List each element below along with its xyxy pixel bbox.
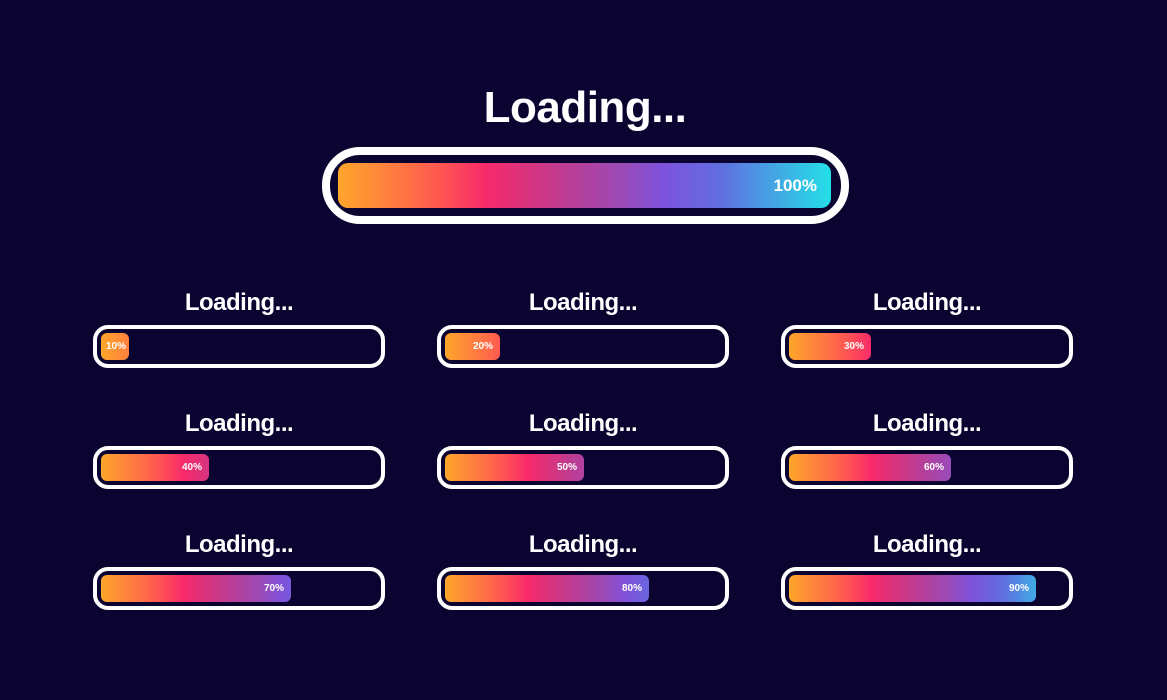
label 20: Loading... [529,289,637,316]
bar 90%: 90% [1009,583,1029,594]
main fill [338,163,831,208]
bar 40% [93,446,385,489]
bar 80%: 80% [622,583,642,594]
bar 50%: 50% [557,462,577,473]
bar 30% [781,325,1073,368]
label 60: Loading... [873,410,981,437]
bar 20%: 20% [473,341,493,352]
label 50: Loading... [529,410,637,437]
bar 60% [781,446,1073,489]
title: Loading... [484,83,686,132]
bar 30%: 30% [844,341,864,352]
bar 40%: 40% [182,462,202,473]
label 10: Loading... [185,289,293,316]
bar 70% [93,567,385,610]
bar 80% [437,567,729,610]
label 70: Loading... [185,531,293,558]
label 40: Loading... [185,410,293,437]
bar 60%: 60% [924,462,944,473]
main fill: 100% [774,176,817,195]
bar 70%: 70% [264,583,284,594]
bar 20% [437,325,729,368]
bar 10%: 10% [106,341,126,352]
label 30: Loading... [873,289,981,316]
main progress bar 100% [322,147,849,224]
label 90: Loading... [873,531,981,558]
bar 90% [781,567,1073,610]
bar 50% [437,446,729,489]
label 80: Loading... [529,531,637,558]
bar 10% [93,325,385,368]
